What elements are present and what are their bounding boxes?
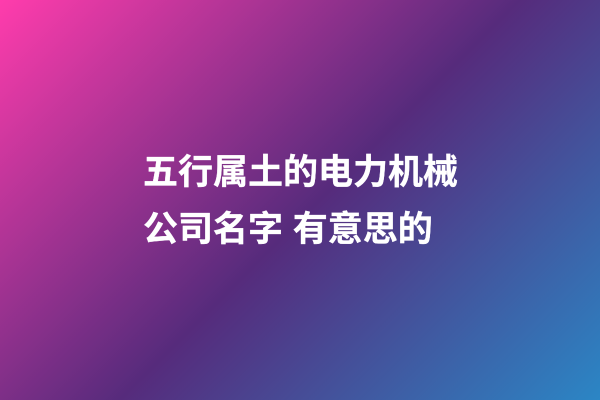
- title: [143, 153, 458, 249]
- title: 五行属土的电力机械: [143, 153, 458, 192]
- title: 公司名字 有意思的: [143, 210, 433, 249]
